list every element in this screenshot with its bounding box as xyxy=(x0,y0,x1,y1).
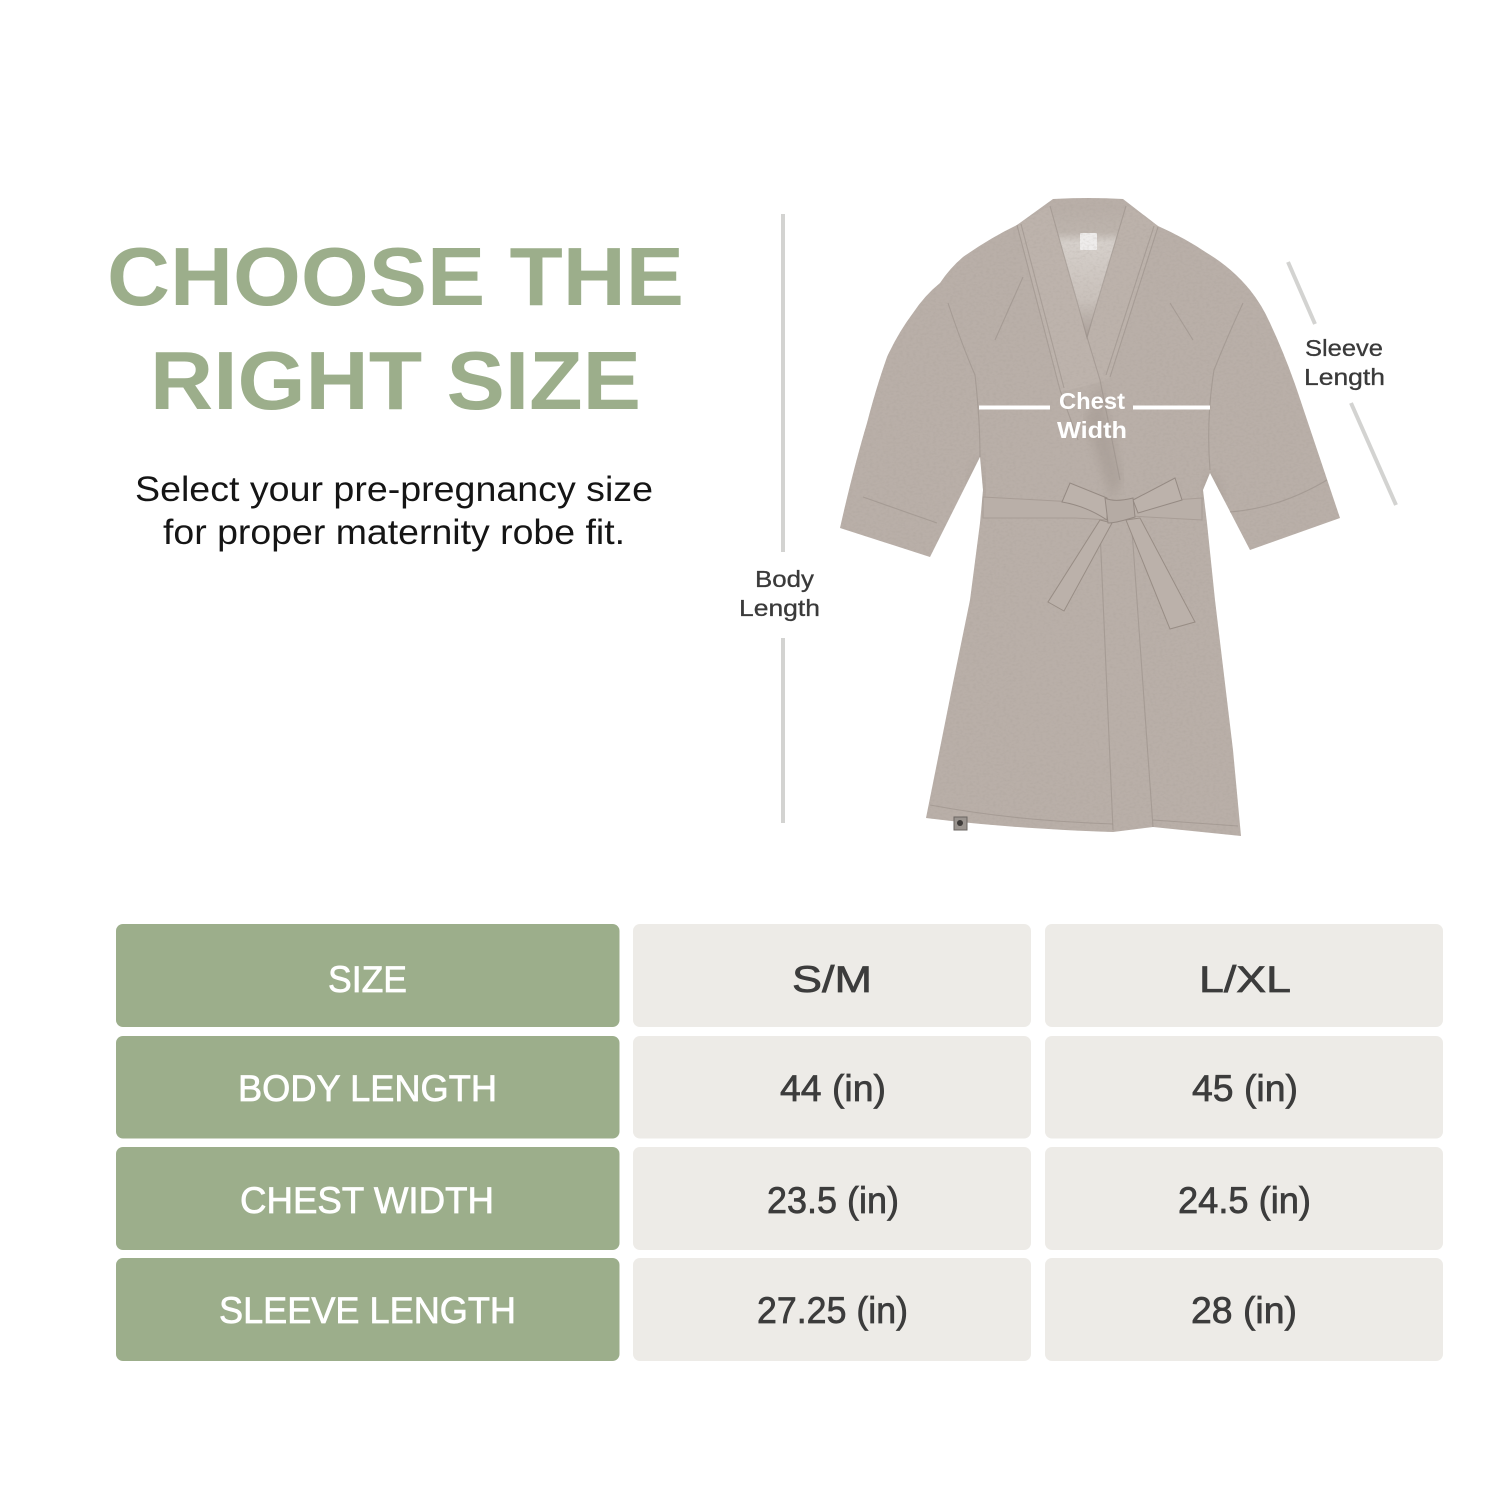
fold shadows xyxy=(1088,398,1218,489)
title: CHOOSE THE xyxy=(107,230,684,323)
sleeve length measure xyxy=(1288,262,1396,505)
collar edges and seams xyxy=(863,206,1327,830)
row: size: SIZE xyxy=(328,959,407,1000)
row: body length: 45 (in) xyxy=(1192,1068,1298,1109)
bow loop right xyxy=(1133,478,1182,513)
row: chest width: CHEST WIDTH xyxy=(240,1180,494,1221)
body length measure: Length xyxy=(739,595,820,621)
row: chest width: 23.5 (in) xyxy=(767,1180,899,1221)
row: size: L/XL xyxy=(1199,959,1291,1000)
belt tail right xyxy=(1126,518,1195,629)
row: sleeve length xyxy=(116,1258,1443,1361)
size table xyxy=(116,924,1443,1361)
belt xyxy=(983,497,1202,520)
row: sleeve length: SLEEVE LENGTH xyxy=(219,1290,516,1331)
row: body length xyxy=(116,1036,1443,1138)
body length measure xyxy=(739,214,820,823)
hem tag xyxy=(954,817,967,830)
row: body length: 44 (in) xyxy=(780,1068,886,1109)
chest width measure: Chest xyxy=(1059,388,1125,414)
chest width measure xyxy=(979,388,1210,443)
belt tail left xyxy=(1048,520,1112,611)
bow knot xyxy=(1105,498,1135,523)
body length measure: Body xyxy=(755,566,815,592)
fabric texture xyxy=(1074,233,1110,270)
infographic: robe size guide xyxy=(110,198,1443,1361)
row: chest width: 24.5 (in) xyxy=(1178,1180,1311,1221)
neck interior xyxy=(1050,205,1126,340)
subtitle text: for proper maternity robe fit. xyxy=(163,513,625,552)
row: body length: BODY LENGTH xyxy=(238,1068,497,1109)
sleeve length measure: Length xyxy=(1304,364,1385,390)
subtitle text xyxy=(135,470,653,552)
collar and lapel panels xyxy=(1017,205,1158,392)
neck label xyxy=(1080,233,1097,250)
row: sleeve length: 28 (in) xyxy=(1191,1290,1297,1331)
robe body and sleeves xyxy=(840,198,1340,836)
title xyxy=(107,230,684,427)
row: chest width xyxy=(116,1147,1443,1250)
robe illustration xyxy=(830,190,1350,840)
subtitle text: Select your pre-pregnancy size xyxy=(135,470,653,509)
title: RIGHT SIZE xyxy=(150,334,641,427)
sleeve length measure: Sleeve xyxy=(1305,335,1383,361)
chest width measure: Width xyxy=(1057,417,1127,443)
row: size: S/M xyxy=(792,959,872,1000)
bow loop left xyxy=(1062,483,1107,520)
row: sleeve length: 27.25 (in) xyxy=(757,1290,908,1331)
row: size xyxy=(116,924,1443,1027)
